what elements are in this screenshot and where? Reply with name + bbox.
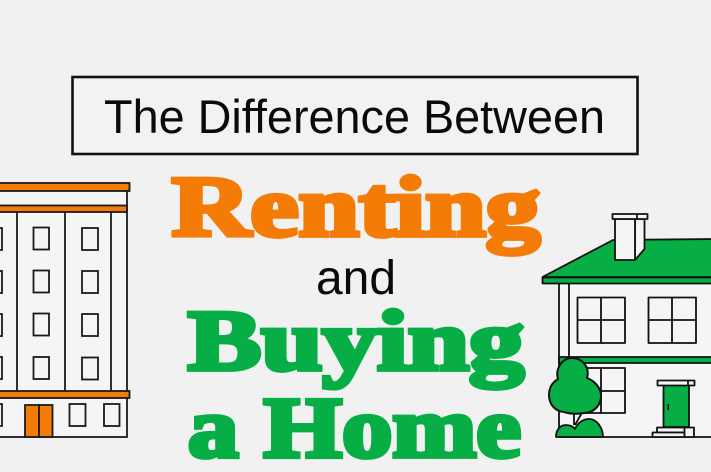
title box: The Difference Between [104, 90, 605, 143]
heading: Buying: Buying [188, 292, 524, 388]
heading: and: and [316, 252, 396, 305]
icon: house [542, 214, 711, 437]
title box [72, 77, 638, 154]
heading: Renting: Renting [172, 158, 540, 254]
icon: apartment building [0, 183, 130, 437]
